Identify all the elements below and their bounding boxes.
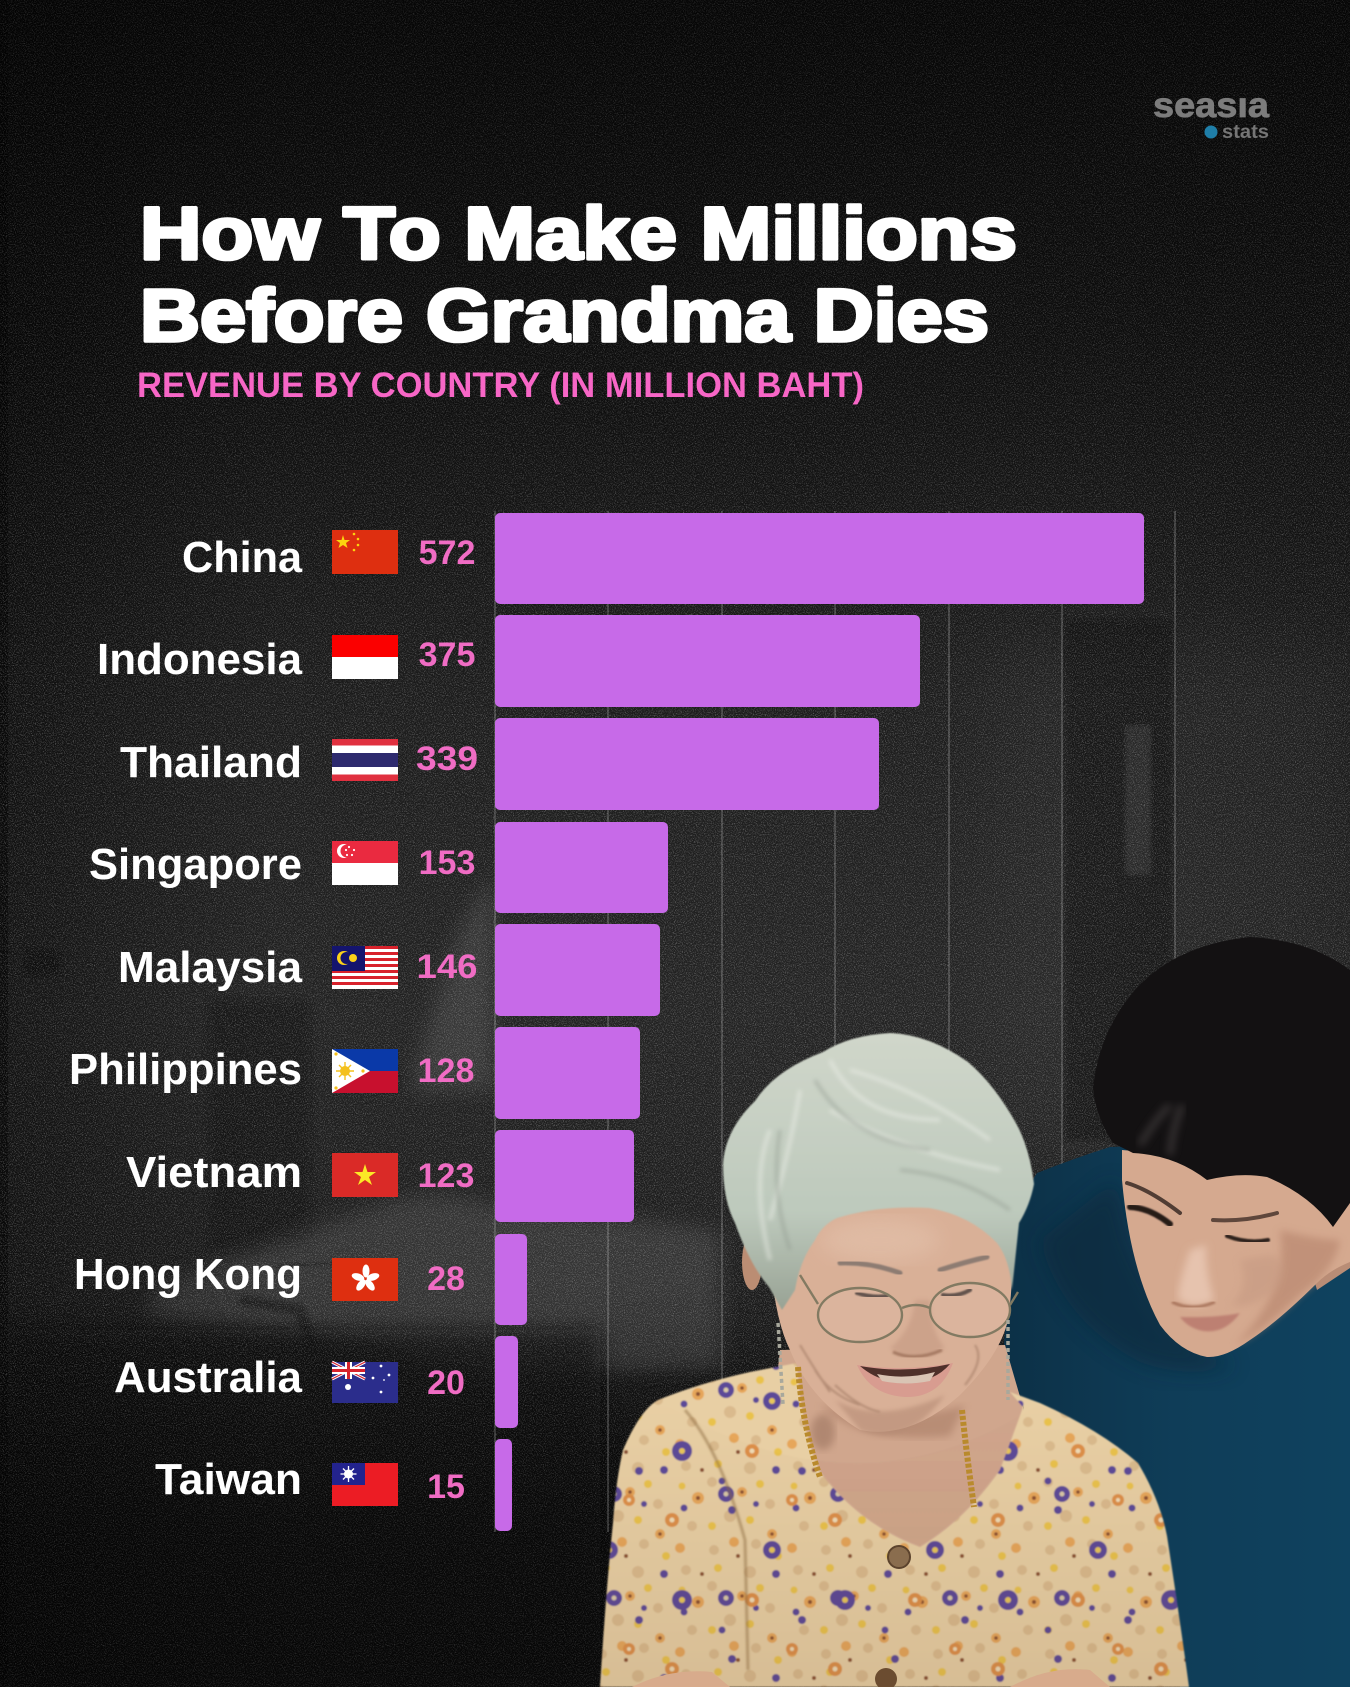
country labels: China	[182, 533, 303, 582]
sweater	[1000, 1140, 1350, 1687]
title: Before Grandma Dies	[140, 274, 989, 357]
flag: Australia	[332, 1362, 398, 1403]
bar: Vietnam	[495, 1130, 634, 1222]
value labels: 20	[427, 1364, 465, 1402]
flag: Taiwan	[332, 1463, 398, 1506]
neck and chest	[770, 1345, 1023, 1565]
bar chart: revenue by country	[495, 511, 1175, 1532]
country labels: Indonesia	[97, 635, 303, 684]
face	[768, 1199, 1012, 1432]
bar: Thailand	[495, 718, 879, 810]
bar: Singapore	[495, 822, 668, 913]
bar: Australia	[495, 1336, 518, 1428]
subtitle: REVENUE BY COUNTRY (IN MILLION BAHT)	[137, 366, 864, 405]
eyes and brows	[1127, 1183, 1277, 1241]
value labels: 572	[419, 534, 475, 572]
face	[1122, 1150, 1350, 1357]
earrings	[778, 1320, 1008, 1404]
blouse buttons	[888, 1546, 910, 1568]
bar: Philippines	[495, 1027, 640, 1119]
bar: China	[495, 513, 1144, 604]
blouse	[600, 1363, 1189, 1687]
value labels: 123	[418, 1157, 474, 1195]
country labels: Thailand	[120, 738, 302, 787]
title	[140, 192, 1017, 357]
country labels	[69, 533, 303, 1504]
neck	[1300, 1200, 1350, 1290]
photo: smiling grandmother in floral blouse	[600, 1033, 1189, 1687]
value labels: 28	[427, 1260, 465, 1298]
photo: young man in navy sweater	[1000, 937, 1350, 1687]
flag: Singapore	[332, 841, 398, 885]
country labels: Taiwan	[155, 1455, 302, 1504]
flag: Vietnam	[332, 1153, 398, 1197]
forearm	[632, 1669, 1110, 1687]
value labels: 153	[419, 844, 475, 882]
value labels: 15	[427, 1468, 465, 1506]
country labels: Singapore	[89, 840, 302, 889]
value labels: 128	[418, 1052, 474, 1090]
country labels: Philippines	[69, 1045, 302, 1094]
hair	[723, 1033, 1034, 1310]
country labels: Vietnam	[126, 1148, 302, 1197]
flag: Thailand	[332, 739, 398, 781]
bar: Malaysia	[495, 924, 660, 1016]
bar: Indonesia	[495, 615, 920, 707]
flag: China	[332, 530, 398, 574]
value labels: 375	[419, 636, 475, 674]
country labels: Australia	[114, 1353, 303, 1402]
hair	[1093, 937, 1350, 1227]
nose and mouth	[1172, 1302, 1215, 1307]
value labels	[416, 534, 478, 1506]
glasses	[800, 1275, 1018, 1342]
flag: Philippines	[332, 1049, 398, 1093]
flag: Indonesia	[332, 635, 398, 679]
logo: seasia stats: seasıa	[1153, 86, 1270, 125]
smile	[857, 1363, 953, 1397]
value labels: 146	[416, 948, 478, 986]
country labels: Malaysia	[118, 943, 303, 992]
nose	[890, 1300, 945, 1356]
value labels: 339	[416, 740, 478, 778]
country labels: Hong Kong	[74, 1250, 302, 1299]
flag: Hong Kong	[332, 1258, 398, 1301]
bar: Hong Kong	[495, 1234, 527, 1325]
flag: Malaysia	[332, 946, 398, 989]
necklace	[798, 1367, 974, 1507]
logo: seasia stats	[1153, 86, 1270, 143]
title: How To Make Millions	[140, 192, 1017, 275]
ear	[742, 1234, 762, 1290]
eyebrows and closed eyes	[840, 1257, 987, 1297]
sleeve seam	[685, 1410, 748, 1670]
bar: Taiwan	[495, 1439, 512, 1531]
logo: seasia stats: stats	[1222, 122, 1269, 143]
